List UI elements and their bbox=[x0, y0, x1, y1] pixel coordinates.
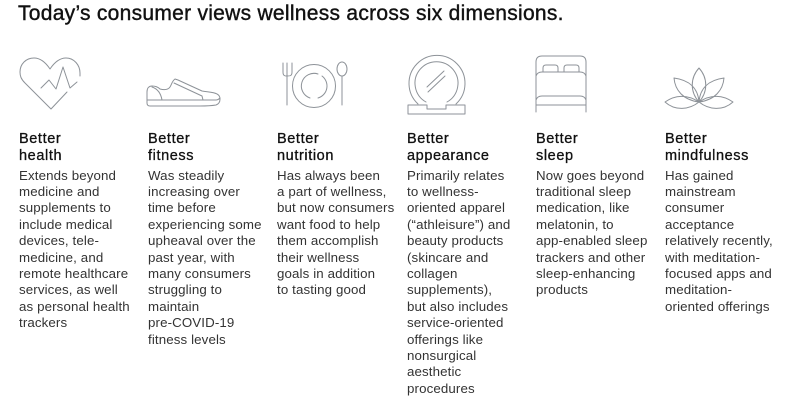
column: better health: Extends beyond bbox=[19, 168, 116, 183]
column: better mindfulness: acceptance bbox=[665, 217, 734, 232]
column: better appearance: but also includes bbox=[407, 299, 508, 314]
column: better nutrition: but now consumers bbox=[277, 200, 394, 215]
column: better fitness: pre-COVID-19 bbox=[148, 315, 234, 330]
column: better health: include medical bbox=[19, 217, 112, 232]
column: better mindfulness: Has gained bbox=[665, 168, 733, 183]
column: better mindfulness: meditation- bbox=[665, 282, 732, 297]
column: better nutrition: nutrition bbox=[277, 148, 334, 164]
column: better fitness: increasing over bbox=[148, 184, 240, 199]
column: better fitness: experiencing some bbox=[148, 217, 262, 232]
column: better mindfulness: oriented offerings bbox=[665, 299, 770, 314]
column: better nutrition: goals in addition bbox=[277, 266, 375, 281]
column: better health bbox=[19, 131, 130, 330]
column: better nutrition bbox=[277, 131, 394, 297]
column: better fitness: many consumers bbox=[148, 266, 251, 281]
column: better appearance: supplements), bbox=[407, 282, 492, 297]
column: better health: health bbox=[19, 148, 62, 164]
column: better health: services, as well bbox=[19, 282, 118, 297]
column: better sleep bbox=[536, 131, 647, 297]
column: better appearance: Better bbox=[407, 131, 449, 147]
column: better health: supplements to bbox=[19, 200, 111, 215]
column: better fitness: Better bbox=[148, 131, 190, 147]
icon: plate and cutlery bbox=[283, 62, 347, 108]
column: better sleep: app-enabled sleep bbox=[536, 233, 647, 248]
column: better health: trackers bbox=[19, 315, 67, 330]
column: better appearance: service-oriented bbox=[407, 315, 504, 330]
column: better health: medicine and bbox=[19, 184, 100, 199]
column: better appearance: (“athleisure”) and bbox=[407, 217, 510, 232]
column: better fitness: struggling to bbox=[148, 282, 222, 297]
column: better sleep: traditional sleep bbox=[536, 184, 631, 199]
column: better appearance: oriented apparel bbox=[407, 200, 505, 215]
column: better fitness: maintain bbox=[148, 299, 199, 314]
column: better health: devices, tele- bbox=[19, 233, 99, 248]
column: better mindfulness: focused apps and bbox=[665, 266, 772, 281]
column: better appearance: beauty products bbox=[407, 233, 503, 248]
column: better appearance bbox=[407, 131, 510, 396]
column: better nutrition: a part of wellness, bbox=[277, 184, 386, 199]
column: better sleep: trackers and other bbox=[536, 250, 645, 265]
column: better fitness: upheaval over the bbox=[148, 233, 256, 248]
column: better mindfulness bbox=[665, 131, 773, 314]
column: better nutrition: to tasting good bbox=[277, 282, 366, 297]
column: better fitness: fitness bbox=[148, 148, 194, 164]
column: better health: Better bbox=[19, 131, 61, 147]
column: better sleep: melatonin, to bbox=[536, 217, 614, 232]
column: better appearance: collagen bbox=[407, 266, 458, 281]
column: better sleep: Now goes beyond bbox=[536, 168, 644, 183]
icon: sneaker bbox=[147, 79, 220, 106]
column: better fitness: time before bbox=[148, 200, 216, 215]
column: better health: remote healthcare bbox=[19, 266, 128, 281]
column: better mindfulness: Better bbox=[665, 131, 707, 147]
column: better sleep: Better bbox=[536, 131, 578, 147]
column: better nutrition: their wellness bbox=[277, 250, 359, 265]
column: better appearance: (skincare and bbox=[407, 250, 488, 265]
column: better mindfulness: mainstream bbox=[665, 184, 736, 199]
column: better fitness bbox=[148, 131, 262, 347]
icon: mirror bbox=[408, 55, 465, 114]
title: Today’s consumer views wellness across six dimensions. bbox=[18, 2, 564, 25]
column: better sleep: products bbox=[536, 282, 588, 297]
column: better sleep: sleep bbox=[536, 148, 574, 164]
column: better nutrition: want food to help bbox=[277, 217, 380, 232]
column: better sleep: medication, like bbox=[536, 200, 630, 215]
column: better mindfulness: consumer bbox=[665, 200, 724, 215]
column: better health: medicine, and bbox=[19, 250, 103, 265]
column: better fitness: past year, with bbox=[148, 250, 235, 265]
column: better sleep: sleep-enhancing bbox=[536, 266, 635, 281]
column: better appearance: nonsurgical bbox=[407, 348, 476, 363]
column: better appearance: Primarily relates bbox=[407, 168, 504, 183]
column: better appearance: offerings like bbox=[407, 332, 483, 347]
column: better fitness: fitness levels bbox=[148, 332, 226, 347]
column: better health: as personal health bbox=[19, 299, 130, 314]
icon: bed bbox=[536, 56, 586, 112]
column: better appearance: to wellness- bbox=[407, 184, 479, 199]
column: better fitness: Was steadily bbox=[148, 168, 224, 183]
column: better nutrition: them accomplish bbox=[277, 233, 379, 248]
column: better mindfulness: relatively recently, bbox=[665, 233, 773, 248]
column: better nutrition: Better bbox=[277, 131, 319, 147]
column: better nutrition: Has always been bbox=[277, 168, 380, 183]
icon: heart with pulse bbox=[20, 58, 80, 109]
column: better appearance: appearance bbox=[407, 148, 490, 164]
icon: lotus bbox=[665, 68, 733, 108]
column: better mindfulness: with meditation- bbox=[665, 250, 760, 265]
icons row bbox=[20, 54, 734, 114]
column: better mindfulness: mindfulness bbox=[665, 148, 749, 164]
column: better appearance: procedures bbox=[407, 381, 475, 396]
column: better appearance: aesthetic bbox=[407, 364, 461, 379]
